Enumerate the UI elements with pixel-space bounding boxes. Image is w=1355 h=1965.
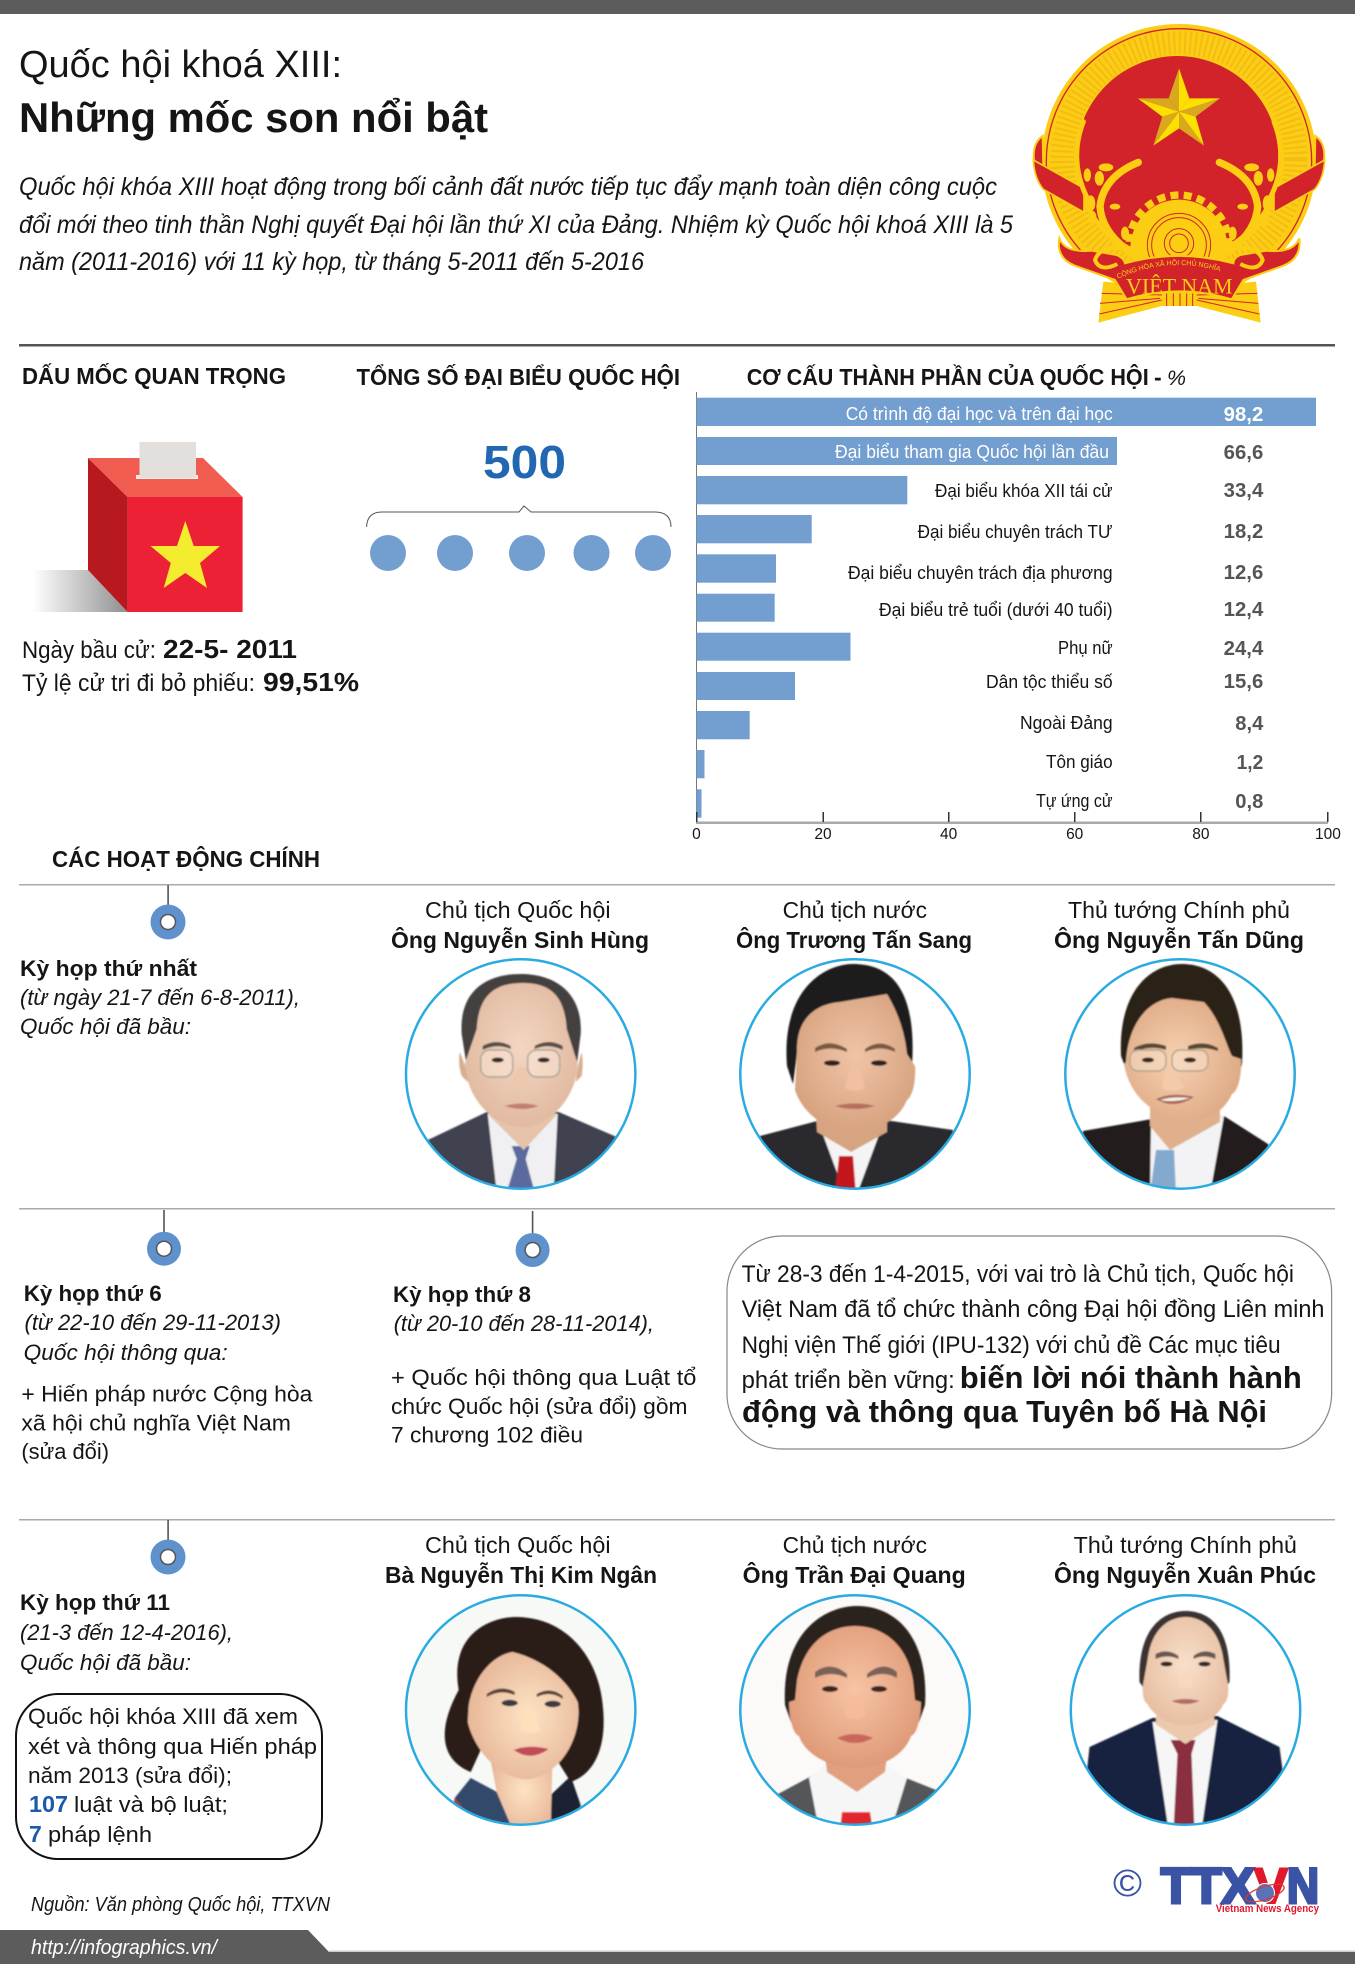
callout: laws passed: năm 2013 (sửa đổi); xyxy=(28,1763,232,1788)
leader names: Bà Nguyễn Thị Kim Ngân xyxy=(385,1561,657,1588)
callout: laws passed: 107 xyxy=(29,1791,68,1817)
callout: IPU-132: phát triển bền vững: xyxy=(742,1367,955,1394)
leader names: Ông Nguyễn Tấn Dũng xyxy=(1054,926,1304,953)
session text: + Quốc hội thông qua Luật tổ xyxy=(391,1365,696,1390)
timeline pin xyxy=(147,1210,181,1266)
emblem banner xyxy=(1059,238,1300,299)
session text xyxy=(391,1282,696,1448)
intro text: đổi mới theo tinh thần Nghị quyết Đại hội lần thứ XI của Đảng. Nhiệm kỳ Quốc hội khoá XIII là 5 xyxy=(19,211,1013,239)
title xyxy=(19,44,488,141)
session text: xã hội chủ nghĩa Việt Nam xyxy=(21,1411,291,1436)
session text: Kỳ họp thứ 8 xyxy=(393,1282,531,1307)
divider xyxy=(19,344,1335,346)
category values: 15,6 xyxy=(1224,671,1263,693)
bar chart xyxy=(692,392,1341,843)
session text: (từ ngày 21-7 đến 6-8-2011), xyxy=(20,985,300,1010)
logo: TTXVN: © xyxy=(1113,1863,1142,1905)
title: Quốc hội khoá XIII: xyxy=(19,44,342,86)
callout: laws passed: pháp lệnh xyxy=(48,1822,152,1847)
leader names: Thủ tướng Chính phủ xyxy=(1068,897,1290,923)
election date xyxy=(22,636,297,664)
intro text: Quốc hội khóa XIII hoạt động trong bối cảnh đất nước tiếp tục đẩy mạnh toàn diện công cuộc xyxy=(19,173,997,201)
title: Những mốc son nổi bật xyxy=(19,94,488,141)
panel: sixth session xyxy=(21,1210,313,1464)
portrait: Nguyễn Sinh Hùng xyxy=(406,959,635,1194)
category values: 12,4 xyxy=(1224,599,1264,621)
leader names: Ông Nguyễn Xuân Phúc xyxy=(1054,1561,1316,1588)
category values: 98,2 xyxy=(1224,404,1263,426)
session text: Quốc hội đã bầu: xyxy=(20,1014,191,1039)
category values: 24,4 xyxy=(1224,638,1264,660)
panel: composition chart xyxy=(692,362,1341,843)
emblem base bars xyxy=(1098,282,1261,323)
heading: composition of the National Assembly: CƠ CẤU THÀNH PHẦN CỦA QUỐC HỘI xyxy=(747,362,1149,390)
callout: IPU-132: Từ 28-3 đến 1-4-2015, với vai trò là Chủ tịch, Quốc hội xyxy=(742,1261,1294,1288)
bar chart: 100 xyxy=(1315,826,1341,843)
leader names: Thủ tướng Chính phủ xyxy=(1074,1532,1297,1558)
category labels: Đại biểu chuyên trách địa phương xyxy=(848,562,1113,583)
bar chart: 20 xyxy=(814,826,832,843)
logo: TTXVN xyxy=(1113,1858,1320,1915)
panel: eleventh session xyxy=(16,1520,1316,1859)
category labels: Đại biểu chuyên trách TƯ xyxy=(918,521,1113,542)
emblem side ribbons xyxy=(1033,136,1325,212)
leader names: Chủ tịch nước xyxy=(783,897,927,923)
category labels: Có trình độ đại học và trên đại học xyxy=(846,403,1113,424)
session text xyxy=(20,1590,233,1675)
session text: (từ 20-10 đến 28-11-2014), xyxy=(394,1311,654,1336)
turnout rate: Tỷ lệ cử tri đi bỏ phiếu: xyxy=(22,670,255,697)
callout: IPU-132: động và thông qua Tuyên bố Hà Nội xyxy=(742,1394,1267,1429)
category values: 0,8 xyxy=(1235,791,1263,813)
panel: first session xyxy=(20,885,1304,1194)
category labels: Ngoài Đảng xyxy=(1020,712,1113,733)
leader names: Ông Nguyễn Sinh Hùng xyxy=(391,926,649,953)
callout: laws passed: xét và thông qua Hiến pháp xyxy=(28,1734,317,1759)
panel: total delegates xyxy=(356,363,680,571)
callout: IPU-132: Nghị viện Thế giới (IPU-132) với chủ đề Các mục tiêu xyxy=(742,1332,1281,1359)
portrait: Nguyễn Tấn Dũng xyxy=(1065,959,1295,1194)
brace xyxy=(367,506,671,527)
category labels: Đại biểu trẻ tuổi (dưới 40 tuổi) xyxy=(879,599,1113,620)
session text: 7 chương 102 điều xyxy=(391,1423,583,1448)
session text: Quốc hội thông qua: xyxy=(24,1340,228,1365)
delegate dots xyxy=(370,535,671,571)
session text: Quốc hội đã bầu: xyxy=(20,1650,191,1675)
timeline pin xyxy=(150,1520,186,1574)
bottom bar: http://infographics.vn/ xyxy=(31,1937,219,1959)
emblem gear xyxy=(1129,195,1229,297)
category values: 33,4 xyxy=(1224,480,1264,502)
heading: total delegates: TỔNG SỐ ĐẠI BIỂU QUỐC HỘI xyxy=(356,363,680,390)
callout: laws passed: luật và bộ luật; xyxy=(74,1792,228,1817)
category labels: Đại biểu khóa XII tái cử xyxy=(935,480,1113,501)
portrait: Trương Tấn Sang xyxy=(740,959,970,1194)
logo: TTXVN: V xyxy=(1254,1858,1289,1914)
category labels: Tự ứng cử xyxy=(1036,790,1113,811)
panel: key milestones xyxy=(22,362,359,697)
callout: IPU-132: biến lời nói thành hành xyxy=(960,1360,1302,1395)
callout: laws passed: 7 xyxy=(29,1821,42,1847)
callout: IPU-132: Việt Nam đã tổ chức thành công Đại hội đồng Liên minh xyxy=(742,1296,1324,1323)
heading: key milestones: DẤU MỐC QUAN TRỌNG xyxy=(22,362,286,389)
icon: national emblem: CỘNG HÒA XÃ HỘI CHỦ NGHĨA xyxy=(1117,258,1220,278)
session text: Kỳ họp thứ 11 xyxy=(20,1590,170,1615)
leader names: Ông Trương Tấn Sang xyxy=(736,926,972,953)
session text xyxy=(21,1281,313,1464)
leader names: Chủ tịch nước xyxy=(783,1532,927,1558)
panel: eighth session xyxy=(391,1211,696,1448)
category values: 1,2 xyxy=(1237,752,1263,774)
session text: + Hiến pháp nước Cộng hòa xyxy=(21,1382,313,1407)
leader names xyxy=(385,1532,1316,1588)
session text: (từ 22-10 đến 29-11-2013) xyxy=(24,1310,281,1335)
portrait: Nguyễn Thị Kim Ngân xyxy=(406,1595,635,1830)
category labels xyxy=(835,403,1113,811)
heading: composition of the National Assembly: - xyxy=(1154,364,1162,390)
callout: laws passed xyxy=(16,1694,322,1859)
icon: national emblem xyxy=(1032,24,1326,323)
bar chart: 60 xyxy=(1066,826,1084,843)
icon: ballot box xyxy=(33,442,243,612)
heading: main activities: CÁC HOẠT ĐỘNG CHÍNH xyxy=(52,845,320,872)
source: Nguồn: Văn phòng Quốc hội, TTXVN xyxy=(31,1894,330,1916)
session text: chức Quốc hội (sửa đổi) gồm xyxy=(391,1394,688,1419)
category values: 12,6 xyxy=(1224,562,1263,584)
icon: emblem star xyxy=(1138,68,1220,146)
session text: (21-3 đến 12-4-2016), xyxy=(20,1620,233,1645)
intro text xyxy=(19,173,1013,276)
logo: TTXVN: N xyxy=(1287,1858,1319,1914)
top bar xyxy=(0,0,1355,14)
callout: laws passed: Quốc hội khóa XIII đã xem xyxy=(28,1704,298,1729)
bottom bar xyxy=(0,1930,1355,1964)
timeline pin xyxy=(516,1211,550,1267)
portrait: Nguyễn Xuân Phúc xyxy=(1071,1595,1300,1830)
number 500: 500 xyxy=(483,436,566,488)
session text: Kỳ họp thứ 6 xyxy=(24,1281,162,1306)
category values xyxy=(1224,404,1264,813)
category labels: Phụ nữ xyxy=(1058,637,1113,658)
category labels: Dân tộc thiểu số xyxy=(986,671,1113,692)
emblem rice stalks xyxy=(1077,122,1281,248)
bar chart: 0 xyxy=(692,826,701,843)
category values: 66,6 xyxy=(1224,442,1263,464)
callout: IPU-132 xyxy=(727,1236,1332,1449)
portrait: Trần Đại Quang xyxy=(740,1595,970,1830)
election date: 22-5- 2011 xyxy=(163,636,297,664)
session text xyxy=(20,956,300,1039)
icon: national emblem: VIỆT NAM xyxy=(1126,273,1233,298)
category labels: Đại biểu tham gia Quốc hội lần đầu xyxy=(835,441,1109,462)
logo: TTXVN: Vietnam News Agency xyxy=(1216,1903,1320,1915)
leader names xyxy=(391,897,1304,953)
leader names: Chủ tịch Quốc hội xyxy=(425,1532,611,1558)
election date: Ngày bầu cử: xyxy=(22,637,156,664)
session text: (sửa đổi) xyxy=(21,1439,109,1464)
category values: 8,4 xyxy=(1235,713,1264,735)
timeline pin xyxy=(150,885,186,940)
session text: Kỳ họp thứ nhất xyxy=(20,956,198,981)
leader names: Chủ tịch Quốc hội xyxy=(425,897,611,923)
turnout rate: 99,51% xyxy=(263,669,359,697)
category labels: Tôn giáo xyxy=(1046,751,1113,772)
heading: composition of the National Assembly: % xyxy=(1167,367,1186,390)
logo: TTXVN: TTX xyxy=(1161,1858,1255,1914)
leader names: Ông Trần Đại Quang xyxy=(743,1561,966,1588)
bar chart: 40 xyxy=(940,826,958,843)
category values: 18,2 xyxy=(1224,521,1263,543)
bar chart: 80 xyxy=(1192,826,1210,843)
intro text: năm (2011-2016) với 11 kỳ họp, từ tháng 5-2011 đến 5-2016 xyxy=(19,248,644,276)
